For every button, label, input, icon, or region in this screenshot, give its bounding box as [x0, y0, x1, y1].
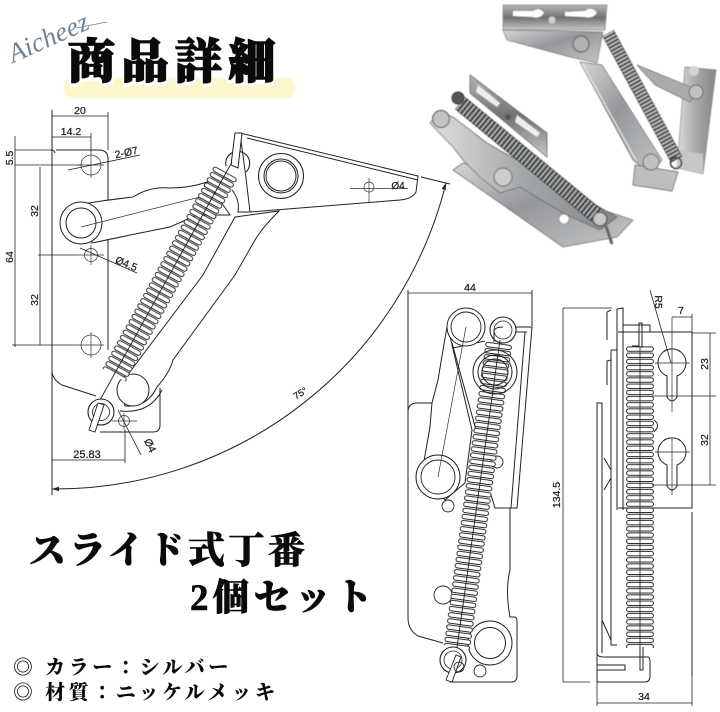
bottom hook: [440, 647, 466, 682]
swing arm: [60, 182, 230, 244]
pivot over spring: [473, 350, 517, 394]
title: 商品詳細: [68, 37, 282, 89]
base plate: [453, 163, 633, 247]
dimension labels: Ø4: [391, 181, 405, 192]
spec list: カラー：シルバー: [45, 657, 232, 679]
back bars: [597, 308, 623, 653]
dimension 44: [408, 282, 532, 294]
dimension labels: Ø4: [141, 437, 158, 455]
dimension labels: [551, 295, 711, 703]
dimension labels: 32: [699, 434, 711, 446]
dimension labels: 75°: [292, 385, 310, 402]
base plate: [408, 290, 517, 682]
left technical drawing: [4, 105, 450, 495]
lower pivot: [117, 374, 162, 411]
top bracket: [503, 5, 607, 30]
triangular arm: [240, 133, 418, 212]
lower arm: [120, 211, 279, 406]
arm: [421, 327, 472, 500]
pin: [623, 325, 650, 332]
dimension labels: 5.5: [4, 151, 16, 165]
spring: [455, 97, 602, 222]
dimension labels: 64: [4, 251, 16, 263]
photo: lower hinge: [430, 75, 633, 247]
dimension labels: 34: [638, 691, 650, 703]
spec list: ◎: [13, 682, 36, 704]
mounting plate: [52, 110, 160, 495]
dimension labels: 25.83: [73, 449, 101, 461]
long bar: [580, 62, 662, 174]
pivot on plate: [689, 85, 703, 99]
pivots and small holes: [442, 500, 454, 512]
bottom bracket: [597, 653, 650, 682]
right plate: [677, 67, 716, 174]
keyholes: [513, 9, 544, 18]
top ring: [226, 133, 250, 172]
dimension labels: 134.5: [551, 482, 563, 508]
title highlight band: [64, 78, 295, 98]
holes with crosshairs: [78, 152, 104, 358]
back bracket: [470, 75, 547, 157]
spring: [100, 162, 238, 400]
dimension labels: [4, 105, 405, 461]
brand logo: Aicheez: [1, 6, 94, 69]
sweep arc 75 degrees: [52, 183, 446, 489]
photo: upper hinge: [503, 5, 716, 191]
dimension labels: 14.2: [61, 126, 81, 138]
dimension labels: 23: [699, 358, 711, 370]
title: 商品詳細: [68, 39, 282, 91]
dimension labels: R5: [652, 295, 664, 309]
product name heading: スライド式丁番: [29, 530, 308, 572]
arm: [430, 112, 617, 230]
top ring: [490, 317, 516, 343]
keyhole slots: [655, 317, 690, 495]
dimension 44: 44: [464, 282, 476, 294]
side flange: [491, 290, 532, 508]
cross bar: [637, 65, 698, 102]
dimension labels: 7: [678, 305, 684, 317]
spec list: [13, 657, 279, 704]
foot plate: [633, 165, 678, 191]
dimension labels: 32: [29, 205, 41, 217]
product name heading: 2個セット: [190, 577, 376, 619]
spring: [444, 340, 512, 655]
right side-view drawing: [551, 290, 716, 706]
right front-view drawing: [408, 282, 532, 682]
spec list: ◎: [13, 657, 36, 679]
bottom hook: [88, 399, 114, 432]
dimension labels: 20: [74, 105, 86, 117]
dimension labels: Ø4.5: [113, 254, 139, 274]
dimension labels: 32: [29, 294, 41, 306]
mounting plate: [618, 332, 692, 676]
dimension lines: [563, 290, 716, 706]
dimension labels: 2-Ø7: [114, 145, 139, 161]
small bracket hole: [112, 413, 137, 430]
small circle behind spring: [654, 420, 658, 432]
spring: [602, 30, 682, 163]
spring: [626, 323, 654, 670]
product name heading: [29, 530, 376, 619]
dimension lines: [12, 112, 141, 463]
spec list: 材質：ニッケルメッキ: [45, 680, 279, 704]
